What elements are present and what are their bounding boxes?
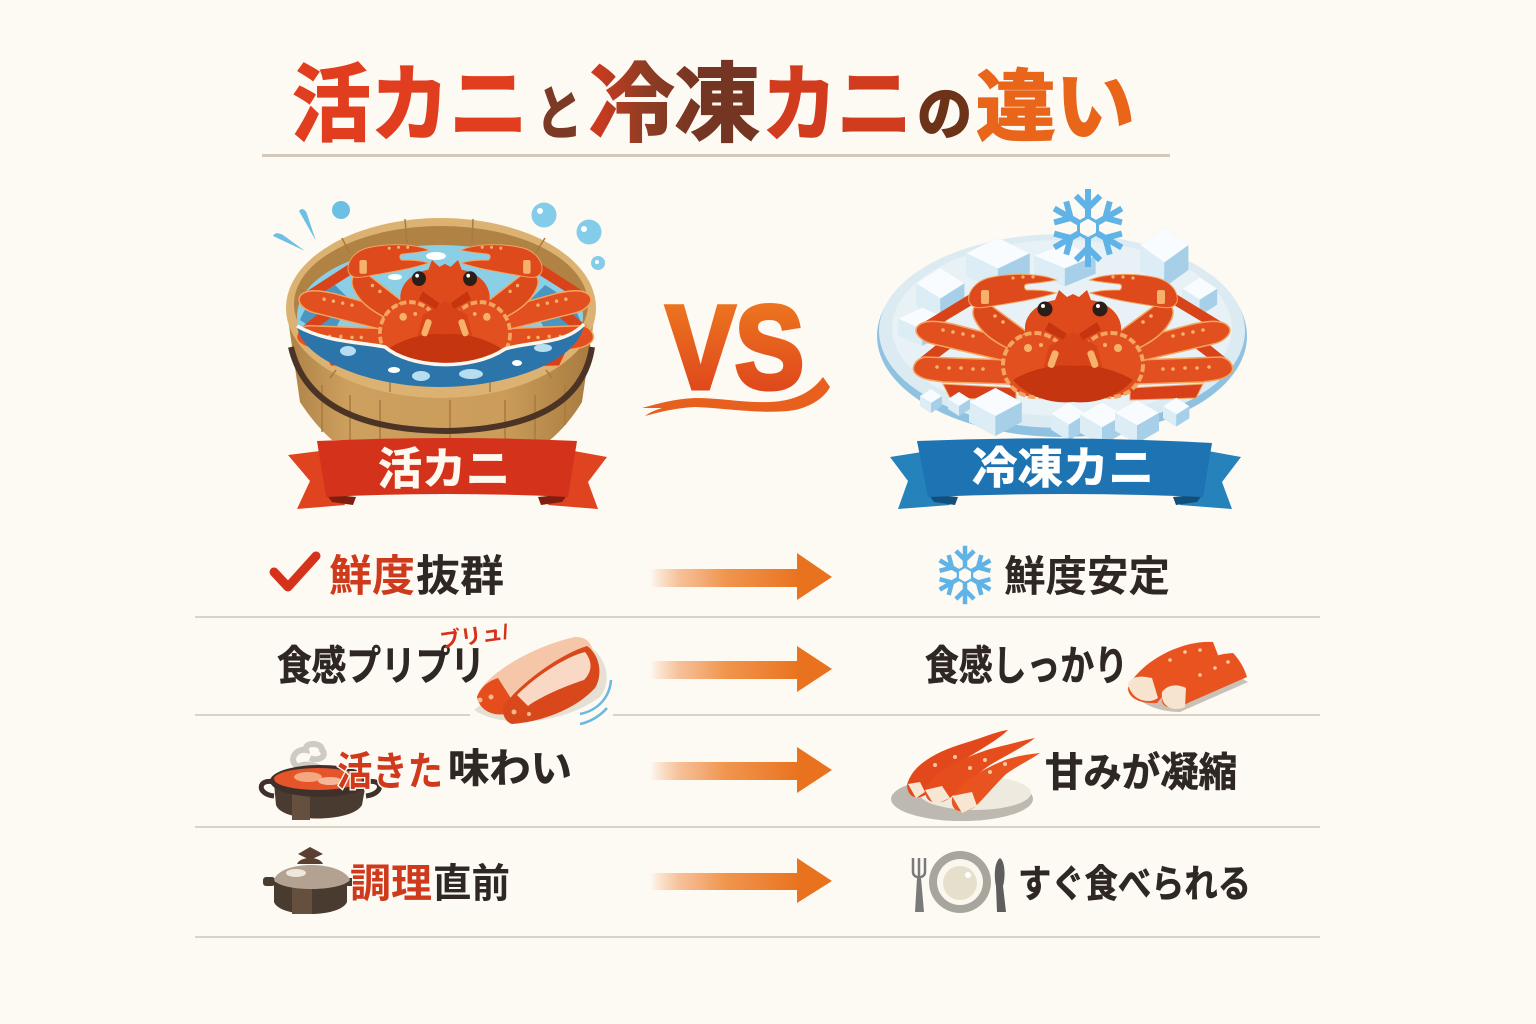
icon: plated crab legs bbox=[891, 730, 1040, 821]
row 2: texture bbox=[277, 620, 1248, 724]
text: live freshness: 鮮度 bbox=[329, 553, 415, 601]
icon: splash and bubbles bbox=[273, 201, 605, 270]
panel: frozen crab bbox=[877, 192, 1247, 509]
text: frozen flavor: 甘みが凝縮 bbox=[1045, 751, 1237, 795]
title: 冷凍 bbox=[589, 57, 760, 153]
text: frozen preparation: すぐ食べられる bbox=[1018, 864, 1251, 906]
illustration: frozen crab bbox=[913, 274, 1233, 402]
text: live freshness: 抜群 bbox=[416, 553, 504, 601]
text: live flavor: 活きた bbox=[337, 750, 443, 794]
title: と bbox=[536, 82, 582, 147]
title: 違い bbox=[976, 63, 1135, 151]
text: live texture: 食感プリプリ bbox=[277, 643, 485, 689]
arrow bbox=[650, 747, 832, 793]
icon: wooden tub bbox=[286, 218, 596, 440]
icon: plate and cutlery bbox=[913, 851, 1006, 913]
icon: red check bbox=[274, 556, 316, 587]
icon: pot with crab stew bbox=[261, 744, 380, 820]
text: live flavor: 味わい bbox=[448, 747, 572, 791]
row 1: freshness bbox=[274, 548, 1170, 602]
icon: lidded pot bbox=[263, 847, 352, 914]
row 4: preparation bbox=[263, 847, 1251, 914]
text: live preparation: 直前 bbox=[433, 862, 510, 906]
icon: blue snowflake bbox=[938, 548, 992, 602]
panel: live crab bbox=[273, 201, 607, 509]
icon: ice plate bbox=[877, 228, 1247, 437]
banner: frozen crab: 冷凍カニ bbox=[972, 444, 1154, 493]
text: onomatopoeia: ブリュ/ bbox=[438, 620, 510, 653]
title: の bbox=[917, 82, 972, 147]
text: frozen texture: 食感しっかり bbox=[925, 643, 1128, 689]
illustration: live crab bbox=[297, 245, 593, 370]
title: 活カニ bbox=[292, 58, 528, 152]
icon: snowflake bbox=[1052, 192, 1124, 264]
title bbox=[292, 57, 1135, 153]
banner: live crab bbox=[288, 438, 607, 509]
row dividers bbox=[195, 616, 1320, 938]
text: frozen freshness: 鮮度安定 bbox=[1004, 553, 1170, 600]
banner: frozen crab bbox=[890, 438, 1241, 509]
VS mark: VS bbox=[666, 282, 804, 414]
text: live preparation bbox=[350, 862, 510, 906]
banner: live crab: 活カニ bbox=[378, 445, 510, 494]
arrow bbox=[650, 553, 832, 600]
text: live preparation: 調理 bbox=[350, 862, 432, 906]
water wave over crab bbox=[297, 324, 584, 387]
text: live flavor bbox=[337, 747, 572, 794]
text: live freshness bbox=[329, 553, 504, 601]
ice in front of crab bbox=[920, 388, 1189, 445]
icon: frozen crab legs bbox=[1128, 642, 1248, 712]
arrow bbox=[650, 858, 832, 903]
icon: plump crab meat bbox=[474, 637, 611, 724]
arrow bbox=[650, 646, 832, 692]
title: カニ bbox=[762, 58, 912, 152]
row 3: flavor bbox=[261, 730, 1237, 821]
